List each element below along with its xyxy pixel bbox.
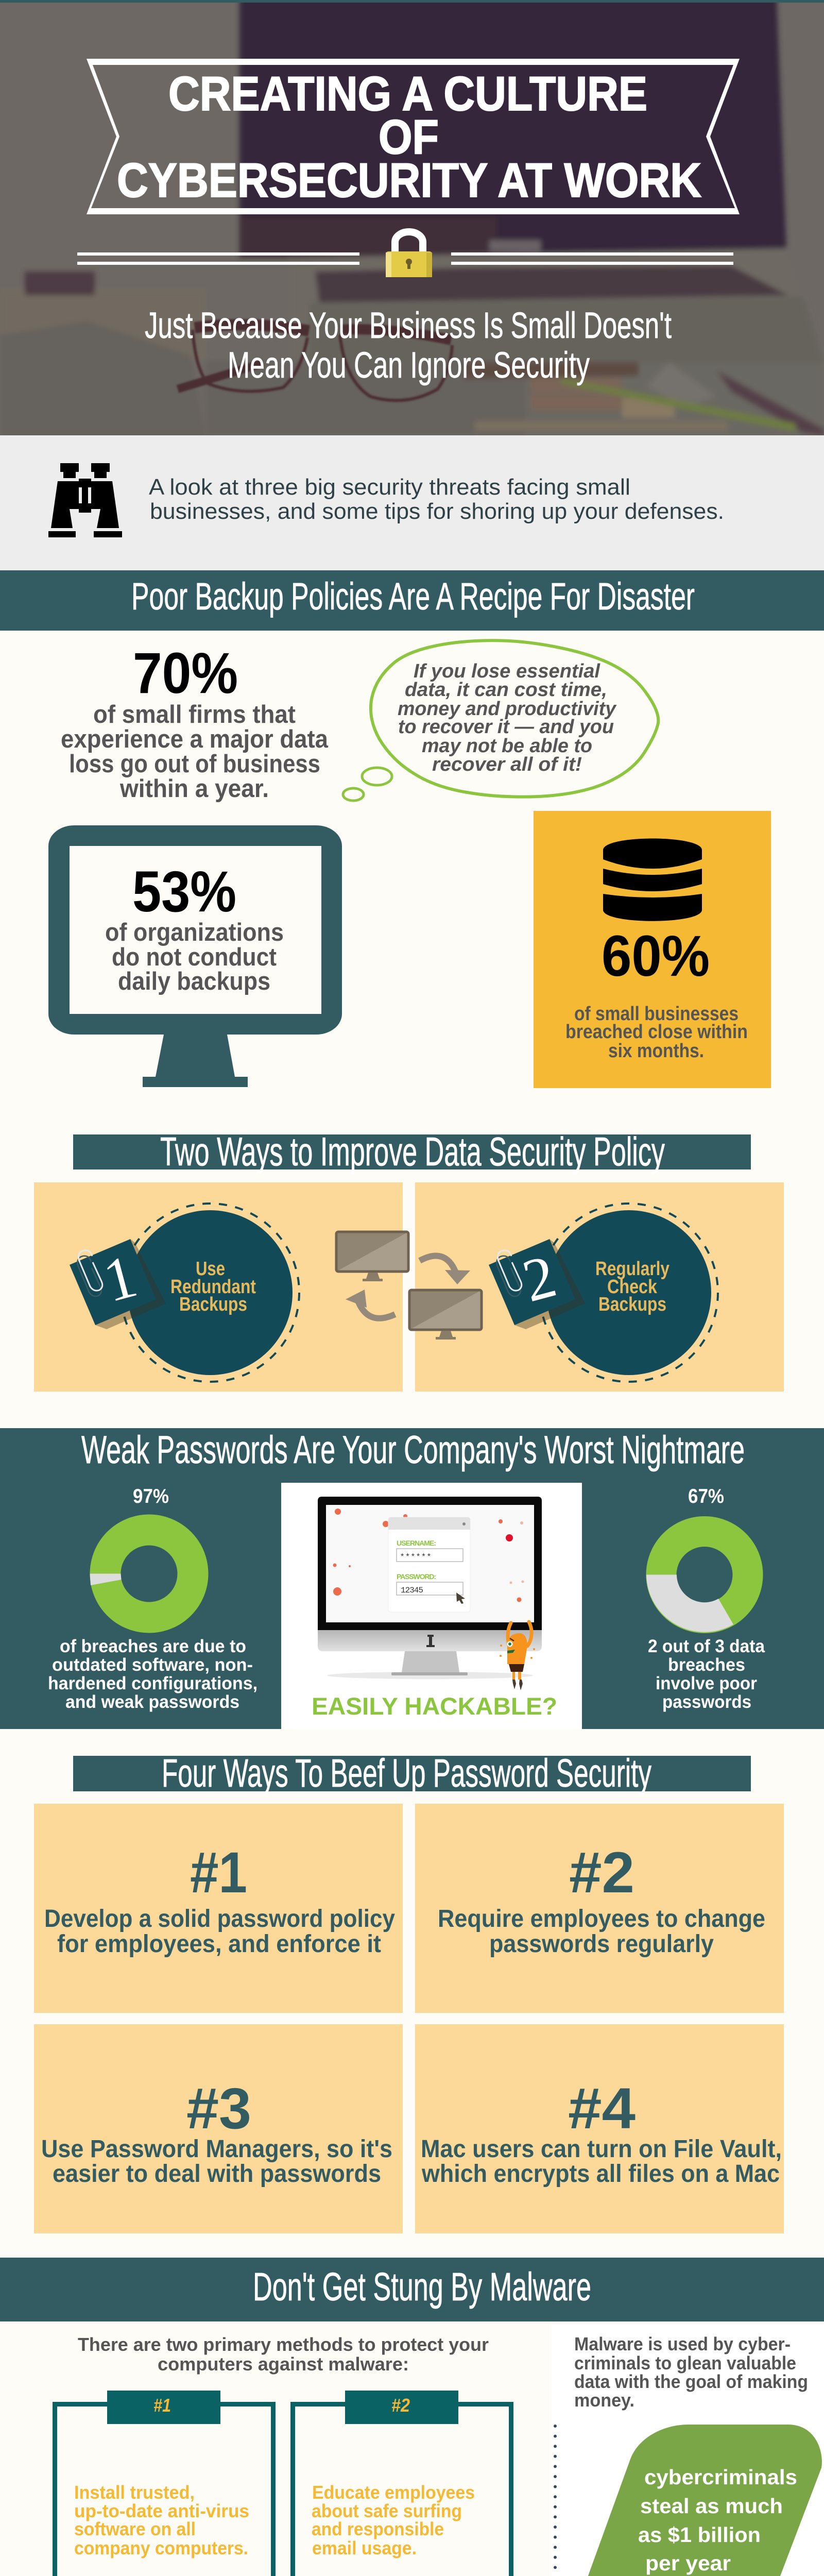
method box 2: #2	[391, 2395, 410, 2416]
orange character	[500, 1622, 535, 1690]
stat: 53% in monitor	[48, 825, 342, 1087]
tip 1: Develop a solid password policy	[44, 1905, 395, 1933]
callout: green blob: as $1 billion	[638, 2523, 761, 2547]
tip 4: Mac users can turn on File Vault,	[421, 2136, 782, 2163]
icon: monitor	[48, 825, 342, 1087]
icon: numbered note 1	[70, 1239, 166, 1329]
callout: thought bubble: money and productivity	[398, 698, 617, 720]
top strip	[0, 0, 824, 3]
icon: binoculars	[48, 463, 122, 537]
donut chart 67	[646, 1531, 748, 1632]
panel: check backups: Backups	[598, 1294, 666, 1315]
login card	[388, 1517, 470, 1612]
subtitle: Mean You Can Ignore Security	[228, 345, 590, 386]
malware side text: money.	[574, 2389, 634, 2411]
tip 3: #3	[186, 2076, 251, 2141]
tip 2: passwords regularly	[489, 1930, 714, 1958]
stat: 97% donut: outdated software, non-	[52, 1655, 253, 1675]
callout: thought bubble: recover all of it!	[432, 754, 582, 775]
stat: 53% in monitor: do not conduct	[112, 943, 277, 971]
tip 4	[415, 2024, 784, 2233]
method box 2: and responsible	[312, 2518, 444, 2539]
panel: check backups	[415, 1182, 784, 1392]
stat: 70%: experience a major data	[61, 725, 329, 753]
glasses in photo	[178, 325, 452, 400]
stat: 97% donut: and weak passwords	[65, 1692, 239, 1712]
malware side text: Malware is used by cyber-	[574, 2333, 791, 2354]
tip 2: Require employees to change	[438, 1905, 765, 1933]
stat: 70%: 70%	[133, 641, 238, 705]
tip 2: #2	[569, 1840, 634, 1905]
stat: 97% donut: 97%	[133, 1485, 169, 1507]
tip 3: easier to deal with passwords	[53, 2160, 381, 2188]
method box 1: #1	[153, 2395, 171, 2416]
white column	[552, 2321, 824, 2576]
panel: redundant backups: Redundant	[170, 1276, 256, 1298]
panel: redundant backups	[34, 1182, 403, 1392]
stat: 60% panel: of small businesses	[574, 1003, 739, 1025]
malware side text: criminals to glean valuable	[574, 2352, 796, 2374]
intro panel	[0, 435, 824, 570]
callout: thought bubble: data, it can cost time,	[405, 679, 607, 701]
stat: 60% panel: six months.	[608, 1040, 704, 1062]
illustration: easily hackable: EASILY HACKABLE?	[312, 1692, 557, 1720]
stat: 53% in monitor: of organizations	[105, 919, 284, 946]
tip 4: which encrypts all files on a Mac	[421, 2160, 780, 2188]
method box 1: company computers.	[74, 2537, 248, 2558]
intro text: A look at three big security threats facing small	[149, 474, 630, 500]
tip 1: for employees, and enforce it	[57, 1930, 381, 1958]
stat: 70%: loss go out of business	[69, 750, 320, 778]
method box 2: about safe surfing	[312, 2500, 462, 2521]
stat: 53% in monitor: daily backups	[118, 968, 270, 995]
method box 2	[293, 2391, 511, 2576]
icon: numbered note 2	[489, 1239, 585, 1329]
stat: 60% panel: breached close within	[565, 1021, 748, 1043]
malware intro text: computers against malware:	[158, 2353, 409, 2375]
malware intro text: There are two primary methods to protect your	[78, 2334, 489, 2355]
stat: 60% panel: 60%	[602, 924, 710, 988]
intro text: businesses, and some tips for shoring up your defenses.	[150, 499, 724, 524]
stat: 67% donut: 67%	[688, 1485, 724, 1507]
login card: USERNAME:	[397, 1539, 436, 1547]
panel: redundant backups: Backups	[179, 1294, 247, 1315]
tip 1	[34, 1804, 403, 2013]
hero photo background	[0, 0, 824, 438]
title banner: OF	[379, 110, 439, 164]
title banner: CYBERSECURITY AT WORK	[117, 153, 701, 207]
login card: ******	[401, 1552, 431, 1561]
stat: 67% donut: breaches	[668, 1655, 745, 1675]
callout: green blob: per year	[645, 2551, 731, 2575]
title banner	[87, 59, 740, 214]
section heading: malware	[0, 2258, 824, 2321]
stat: 67% donut: passwords	[662, 1692, 751, 1712]
callout: green blob: steal as much	[640, 2494, 783, 2518]
tip 1: #1	[190, 1840, 247, 1905]
dotted divider	[554, 2426, 557, 2576]
stat: 67% donut	[646, 1485, 765, 1712]
stat: 70%	[61, 641, 329, 803]
tip 3	[34, 2024, 403, 2233]
tip 4: #4	[568, 2076, 636, 2141]
method box 2: email usage.	[312, 2537, 417, 2558]
method box 1	[55, 2391, 273, 2576]
callout: green blob	[587, 2425, 822, 2576]
red dots	[333, 1509, 524, 1602]
intro text	[149, 474, 724, 524]
icon: numbered note 2: 2	[516, 1242, 563, 1315]
malware side text: data with the goal of making	[574, 2371, 808, 2392]
stat: 70%: of small firms that	[93, 701, 296, 728]
computer	[318, 1497, 542, 1679]
stat: 67% donut: 2 out of 3 data	[648, 1636, 765, 1656]
stat: 97% donut	[48, 1485, 258, 1712]
subtitle	[145, 306, 672, 386]
method box 1: software on all	[74, 2518, 196, 2539]
stat: 70%: within a year.	[119, 775, 269, 803]
icon: numbered note 1: 1	[97, 1242, 144, 1315]
stat: 97% donut: hardened configurations,	[48, 1673, 258, 1693]
icon: database	[603, 839, 702, 921]
panel: check backups: Regularly	[595, 1258, 670, 1280]
callout: green blob: cybercriminals	[644, 2465, 797, 2489]
section heading: malware: Don't Get Stung By Malware	[253, 2265, 591, 2309]
title banner: CREATING A CULTURE	[168, 66, 647, 121]
stat: 97% donut: of breaches are due to	[60, 1636, 246, 1656]
section: weak passwords	[0, 1428, 824, 1729]
callout: thought bubble: If you lose essential	[414, 660, 600, 682]
panel: redundant backups: Use	[196, 1258, 225, 1280]
stat: 67% donut: involve poor	[656, 1673, 757, 1693]
method box 1: Install trusted,	[74, 2482, 195, 2503]
malware intro text	[78, 2334, 489, 2375]
section heading: backup	[0, 570, 824, 631]
panel: check backups: Check	[607, 1276, 658, 1298]
icon: sync computers	[336, 1232, 482, 1340]
divider with padlock	[77, 232, 733, 277]
login card: 12345	[401, 1586, 423, 1595]
illustration: easily hackable	[281, 1483, 582, 1729]
stat: 53% in monitor: 53%	[132, 859, 236, 924]
tip 2	[415, 1804, 784, 2013]
donut chart 97	[90, 1530, 193, 1618]
callout: thought bubble	[343, 640, 658, 801]
callout: thought bubble: to recover it — and you	[398, 716, 614, 738]
tip 3: Use Password Managers, so it's	[41, 2136, 392, 2163]
method box 2: Educate employees	[312, 2482, 475, 2503]
login card: PASSWORD:	[397, 1572, 436, 1581]
malware side text	[574, 2333, 808, 2411]
method box 1: up-to-date anti-virus	[74, 2500, 249, 2521]
callout: thought bubble: may not be able to	[422, 735, 592, 757]
stat: 60% panel	[534, 811, 771, 1088]
